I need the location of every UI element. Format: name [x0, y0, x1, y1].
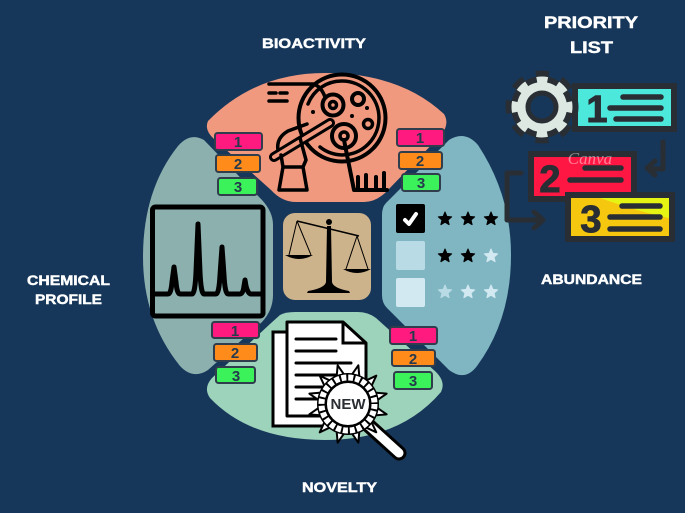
heading: novelty: NOVELTY	[302, 479, 378, 495]
heading: chemical profile: CHEMICAL	[27, 272, 110, 288]
tags: novelty right: 1	[409, 328, 417, 345]
tags: bioactivity left: 2	[234, 156, 242, 173]
heading: bioactivity: BIOACTIVITY	[262, 35, 367, 51]
tags: bioactivity right: 3	[417, 175, 425, 192]
heading: priority list: LIST	[570, 39, 613, 57]
tags: novelty right: 3	[409, 373, 417, 390]
icon: new document with magnifier: NEW	[330, 396, 366, 413]
tags: bioactivity left	[215, 133, 262, 196]
icon: balance scale	[283, 213, 371, 300]
tags: bioactivity left: 3	[234, 179, 242, 196]
tags: novelty left: 1	[231, 323, 239, 340]
icon: card 2: Canva	[568, 149, 612, 168]
tags: bioactivity right: 1	[416, 130, 424, 147]
panel: abundance	[382, 136, 511, 375]
icon: checklist with stars	[396, 204, 498, 307]
tags: novelty left: 3	[232, 368, 240, 385]
heading: priority list: PRIORITY	[544, 14, 638, 32]
chart: chromatogram	[152, 207, 263, 316]
tags: bioactivity right	[397, 129, 444, 192]
icon: petri dish with hand	[269, 74, 387, 190]
arrow: card 2 to card 3	[507, 173, 543, 228]
panel: chemical profile	[143, 137, 273, 374]
arrow: card 1 to card 2	[647, 142, 663, 175]
heading: priority list	[544, 14, 638, 57]
icon: gear and card 1	[510, 75, 674, 139]
icon: priority list steps	[507, 75, 674, 241]
heading: abundance: ABUNDANCE	[541, 271, 642, 287]
tags: bioactivity right: 2	[416, 153, 424, 170]
panel: novelty	[207, 312, 443, 440]
icon: gear and card 1: 1	[586, 89, 608, 131]
icon: card 3	[568, 195, 672, 241]
heading: chemical profile	[27, 272, 110, 307]
icon: card 3: 3	[580, 199, 602, 241]
tags: novelty left	[212, 322, 259, 385]
panel: bioactivity	[207, 73, 446, 202]
heading: chemical profile: PROFILE	[35, 291, 102, 307]
tags: novelty right: 2	[409, 351, 417, 368]
icon: new document with magnifier	[273, 322, 399, 453]
tags: novelty left: 2	[231, 345, 239, 362]
tags: bioactivity left: 1	[234, 134, 242, 151]
icon: card 2	[531, 149, 634, 201]
tags: novelty right	[390, 327, 437, 390]
icon: card 2: 2	[539, 159, 561, 201]
